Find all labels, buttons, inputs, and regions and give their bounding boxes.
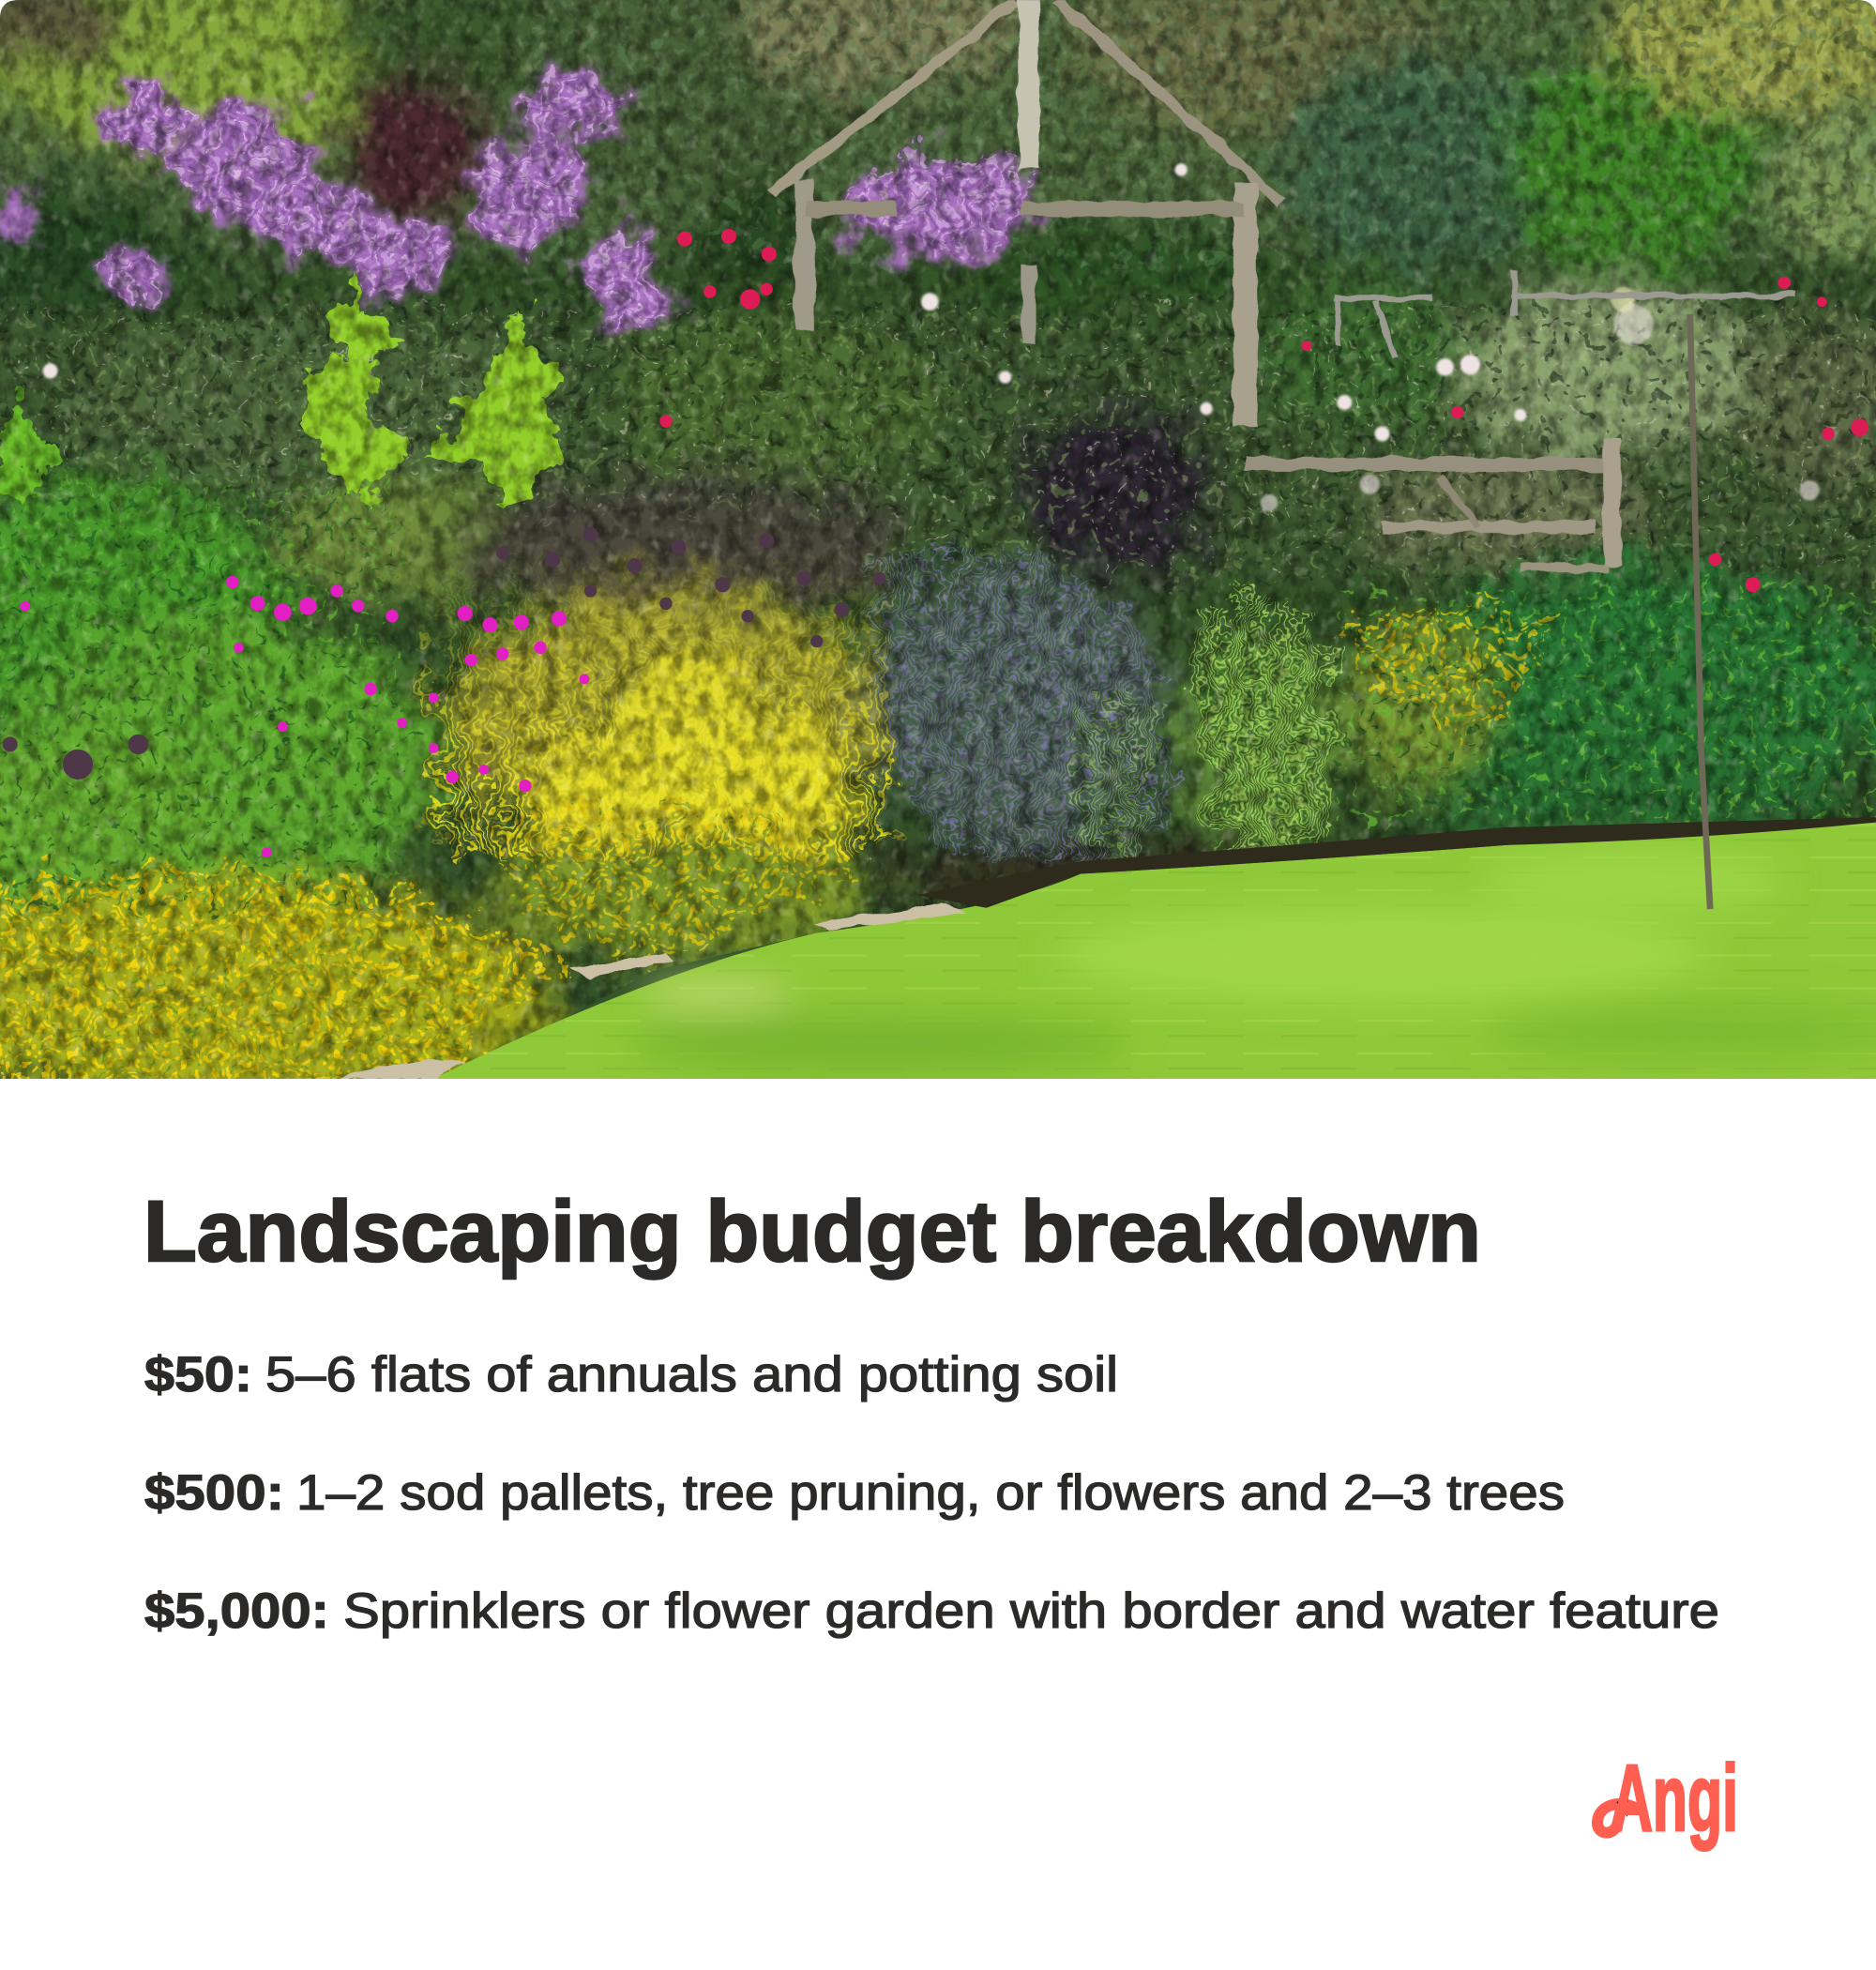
pale blossoms [43, 163, 1820, 512]
logo: Angi [1597, 1746, 1738, 1851]
title: Landscaping budget breakdown [144, 1184, 1481, 1280]
yellow reed stems [427, 553, 892, 855]
purple blooms [0, 71, 1040, 340]
foliage texture [0, 0, 1876, 1091]
budget line: $500: $500: [144, 1465, 284, 1521]
budget line: $50: 5–6 flats of annuals and potting soil [265, 1347, 1118, 1402]
wooden arbor [777, 0, 1277, 415]
mid border shrubs [0, 277, 1876, 591]
magenta flowers [20, 576, 589, 857]
budget line: $5,000: Sprinklers or flower garden with border and water feature [343, 1584, 1719, 1639]
soil edge [917, 817, 1876, 908]
allium seed heads [3, 527, 885, 780]
budget line: $500: 1–2 sod pallets, tree pruning, or flowers and 2–3 trees [296, 1465, 1565, 1521]
wooden fence [1244, 270, 1797, 568]
text and logo area [144, 1184, 1738, 1852]
logo: Angi: Angi [1611, 1746, 1738, 1851]
background trees [0, 0, 1876, 306]
roses [659, 229, 1868, 592]
garden planting [0, 0, 1876, 1154]
gravel edging [329, 902, 967, 1079]
maple foliage [0, 270, 558, 509]
lavender and ornamental grass [867, 552, 1332, 874]
budget line: $50: $50: [144, 1347, 252, 1402]
yellow flowers [0, 606, 1551, 1131]
foreground planting masses [0, 477, 1876, 1106]
lawn [433, 817, 1876, 1079]
young tree trunk [1690, 314, 1710, 909]
budget line: $5,000: $5,000: [144, 1584, 329, 1639]
